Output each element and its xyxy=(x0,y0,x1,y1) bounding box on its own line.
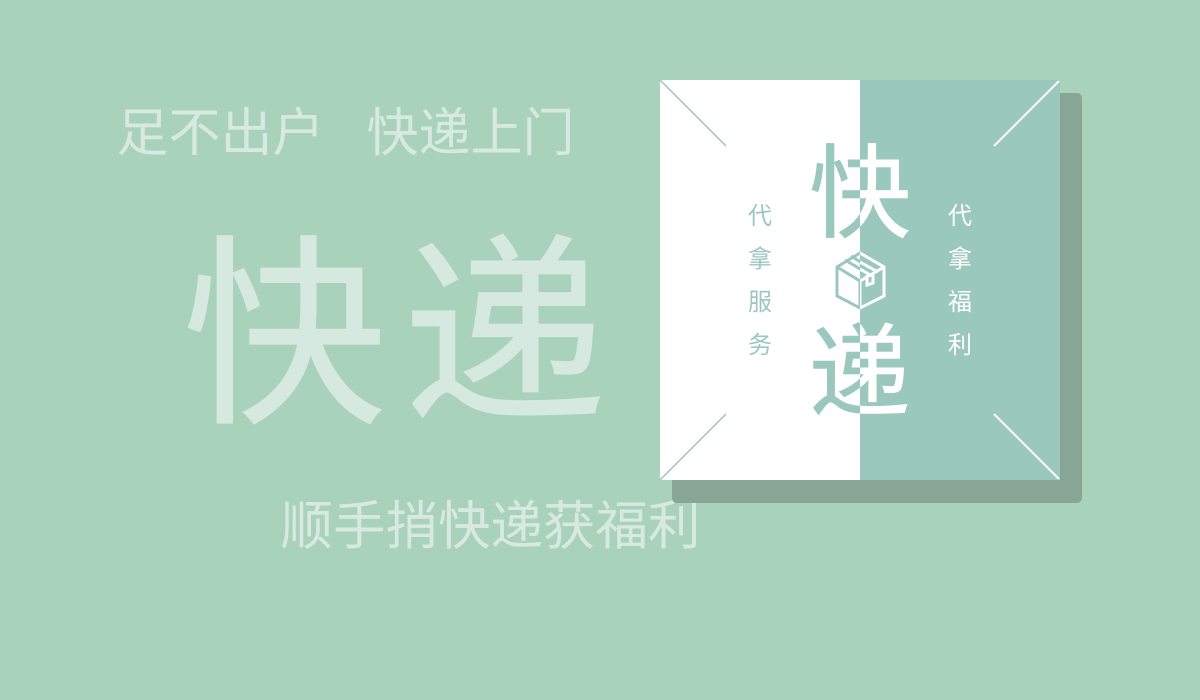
corner line: bottom left xyxy=(660,414,726,480)
vertical text: 代拿福利: 福 xyxy=(948,289,972,316)
card title: teal on white xyxy=(812,143,860,416)
tagline: top left: 足不出户 xyxy=(116,105,325,163)
corner line: bottom right xyxy=(994,414,1059,479)
tagline: top right: 快递上门 xyxy=(366,105,575,163)
corner line: top left xyxy=(660,80,726,146)
main title: 递 xyxy=(402,222,606,450)
main title: 快 xyxy=(182,223,386,451)
corner line: top right xyxy=(994,81,1059,146)
vertical text: 代拿服务: 服 xyxy=(748,289,772,316)
vertical text: 代拿福利 xyxy=(948,203,972,359)
icon: parcel box, white side xyxy=(860,251,886,310)
panel: card teal half xyxy=(860,80,1060,480)
vertical text: 代拿服务: 代 xyxy=(748,203,772,230)
subtitle: 顺手捎快递获福利 xyxy=(280,497,701,556)
card title: teal on white: 递 xyxy=(808,317,910,431)
vertical text: 代拿福利: 拿 xyxy=(948,246,972,273)
card title: white on teal: 快 xyxy=(809,138,911,252)
icon: parcel box, teal side xyxy=(836,251,860,310)
vertical text: 代拿服务: 务 xyxy=(748,332,772,359)
card shadow xyxy=(672,93,1082,503)
vertical text: 代拿福利: 利 xyxy=(948,332,972,359)
card title: teal on white: 快 xyxy=(809,138,911,252)
card title: white on teal: 递 xyxy=(808,317,910,431)
vertical text: 代拿服务 xyxy=(748,203,772,359)
main title xyxy=(182,222,606,451)
card title: white on teal xyxy=(860,143,909,414)
vertical text: 代拿服务: 拿 xyxy=(748,246,772,273)
vertical text: 代拿福利: 代 xyxy=(948,203,972,230)
panel: card white half xyxy=(660,80,860,480)
